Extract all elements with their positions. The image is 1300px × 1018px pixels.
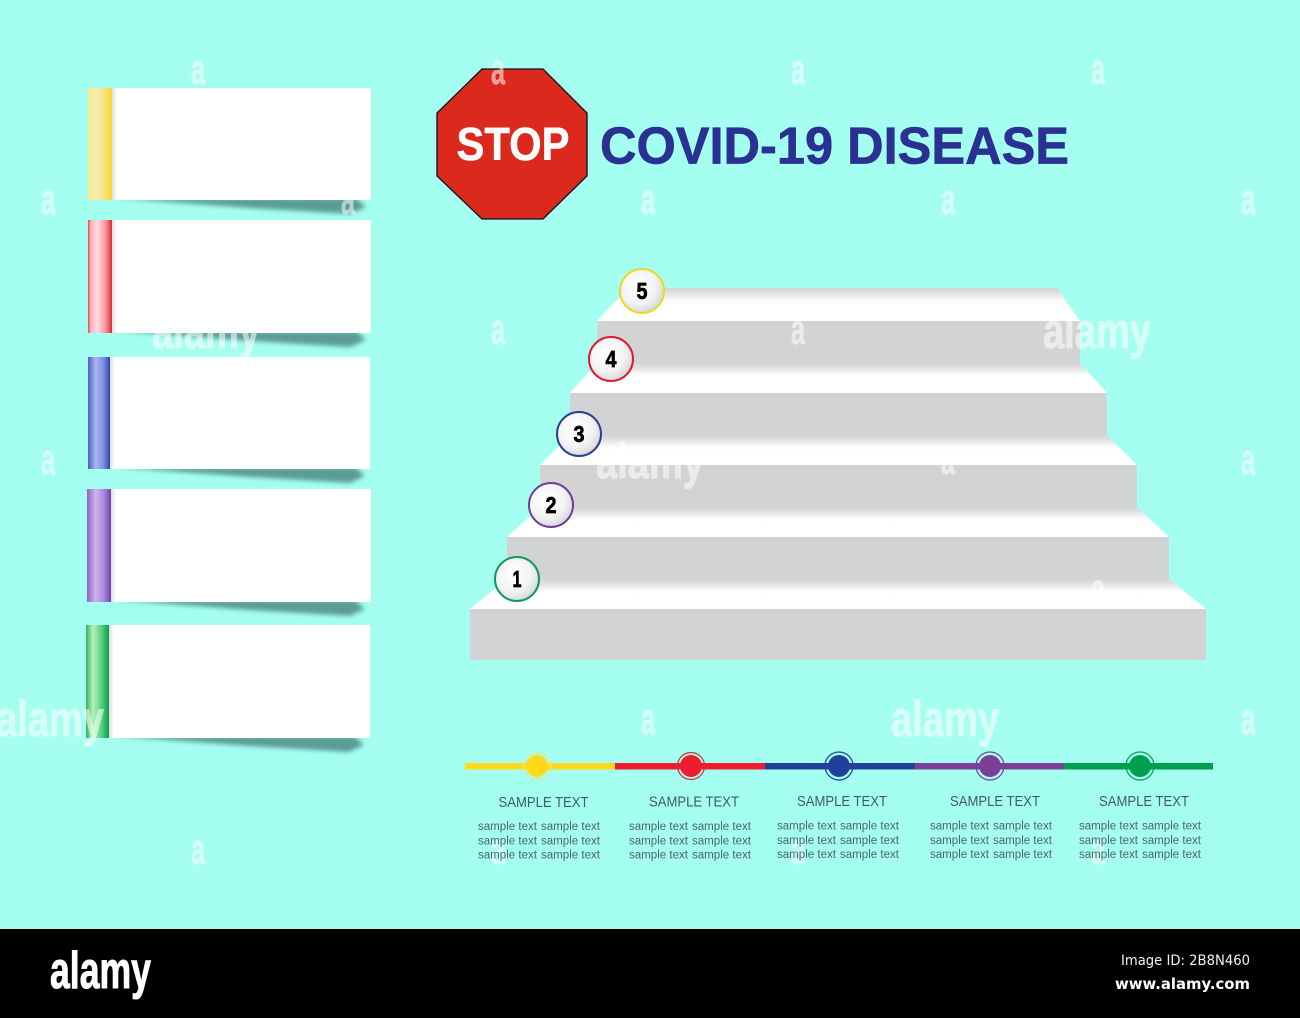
timeline marker: purple [976, 752, 1004, 780]
text block 1: sample text [541, 821, 601, 833]
text block 3 [777, 793, 900, 861]
text block 4: SAMPLE TEXT [950, 793, 1040, 810]
watermarks: a [491, 45, 505, 94]
footer logo: alamy [50, 942, 151, 1000]
text block 3: sample text [840, 849, 900, 861]
text block 4: sample text [930, 820, 990, 832]
text block 2: sample text [629, 836, 689, 848]
text block 4: sample text [993, 849, 1053, 861]
text block 2: SAMPLE TEXT [649, 794, 739, 810]
text block 2: sample text [692, 850, 752, 862]
watermarks: a [491, 825, 505, 874]
watermarks: a [41, 175, 55, 224]
watermarks: a [491, 305, 505, 354]
watermarks: a [791, 825, 805, 874]
watermarks: a [1091, 825, 1105, 874]
watermarks: a [191, 45, 205, 94]
text block 5: sample text [1079, 820, 1139, 832]
text block 5: sample text [1142, 820, 1202, 832]
text block 5 [1079, 793, 1202, 861]
step badge 5: 5 [636, 278, 648, 304]
text block 1: sample text [478, 836, 538, 848]
footer bar [0, 929, 1300, 1018]
card 3: blue [88, 357, 370, 483]
text block 1: sample text [541, 850, 601, 862]
text block 2: sample text [692, 836, 752, 848]
text block 1: sample text [541, 836, 601, 848]
watermarks: a [791, 305, 805, 354]
step 5 riser [597, 321, 1080, 363]
watermarks: a [1091, 565, 1105, 614]
icon: stop sign [437, 69, 587, 219]
image id: Image ID: 2B8N460 [1121, 953, 1250, 969]
timeline line [465, 763, 1213, 770]
card 1: yellow [88, 88, 371, 214]
step 4 riser [570, 393, 1107, 435]
text block 2: sample text [629, 850, 689, 862]
watermarks: a [41, 435, 55, 484]
step badge 4: 4 [606, 346, 617, 372]
text block 3: sample text [840, 835, 900, 847]
timeline marker: blue [825, 752, 853, 780]
text block 1: sample text [478, 850, 538, 862]
watermarks: a [1241, 175, 1255, 224]
text block 5: sample text [1142, 849, 1202, 861]
watermarks: alamy [152, 303, 260, 359]
panel: note cards [86, 88, 371, 752]
step 1 tread [470, 579, 1206, 609]
watermarks: a [941, 435, 955, 484]
watermarks: alamy [596, 433, 704, 489]
step 1 riser [470, 609, 1206, 660]
text block 3: sample text [840, 820, 900, 832]
timeline marker: green [1126, 752, 1154, 780]
step badge 3 [557, 412, 601, 456]
card 5: green [86, 625, 370, 752]
watermarks: alamy [891, 691, 999, 747]
icon: stop sign: STOP [456, 118, 570, 170]
step badge 1 [495, 557, 539, 601]
watermarks: a [191, 825, 205, 874]
text block 3: sample text [777, 820, 837, 832]
text block 5: sample text [1079, 835, 1139, 847]
timeline marker: yellow [524, 752, 550, 780]
watermarks: a [791, 45, 805, 94]
step badge 1: 1 [512, 566, 522, 592]
card 2: red [88, 220, 371, 347]
step badge 3: 3 [574, 421, 584, 447]
title: COVID-19 DISEASE [600, 118, 1069, 176]
step 3 tread [540, 435, 1137, 465]
step 4 tread [570, 363, 1107, 393]
watermarks: a [641, 175, 655, 224]
step badge 2: 2 [546, 492, 556, 518]
watermarks: alamy [0, 691, 104, 747]
watermarks: a [641, 695, 655, 744]
chart: staircase [470, 288, 1206, 660]
text block 5: sample text [1142, 835, 1202, 847]
watermarks: alamy [1043, 303, 1151, 359]
step 2 tread [507, 507, 1169, 537]
text block 1: sample text [478, 821, 538, 833]
text block 4: sample text [930, 835, 990, 847]
text block 2 [629, 794, 752, 862]
step 3 riser [540, 465, 1137, 507]
text block 3: sample text [777, 849, 837, 861]
website: www.alamy.com [1115, 975, 1250, 993]
step badge 2 [529, 483, 573, 527]
watermarks: a [1241, 435, 1255, 484]
card 4: purple [87, 489, 371, 616]
text block 2: sample text [692, 821, 752, 833]
text block 5: sample text [1079, 849, 1139, 861]
text block 3: SAMPLE TEXT [797, 793, 887, 810]
text block 2: sample text [629, 821, 689, 833]
timeline marker: red [678, 752, 704, 780]
step badge 4 [589, 337, 633, 381]
step badge 5 [620, 269, 664, 313]
text block 1 [478, 794, 601, 862]
text block 5: SAMPLE TEXT [1099, 793, 1189, 810]
text block 4 [930, 793, 1053, 861]
text block 1: SAMPLE TEXT [498, 794, 588, 811]
step 2 riser [507, 537, 1169, 579]
step 5 top tread [597, 288, 1080, 321]
text block 3: sample text [777, 835, 837, 847]
watermarks [0, 45, 1255, 874]
text block 4: sample text [930, 849, 990, 861]
watermarks: a [1091, 45, 1105, 94]
watermarks: a [941, 175, 955, 224]
watermarks: a [341, 175, 355, 224]
text block 4: sample text [993, 835, 1053, 847]
watermarks: a [1241, 695, 1255, 744]
text block 4: sample text [993, 820, 1053, 832]
